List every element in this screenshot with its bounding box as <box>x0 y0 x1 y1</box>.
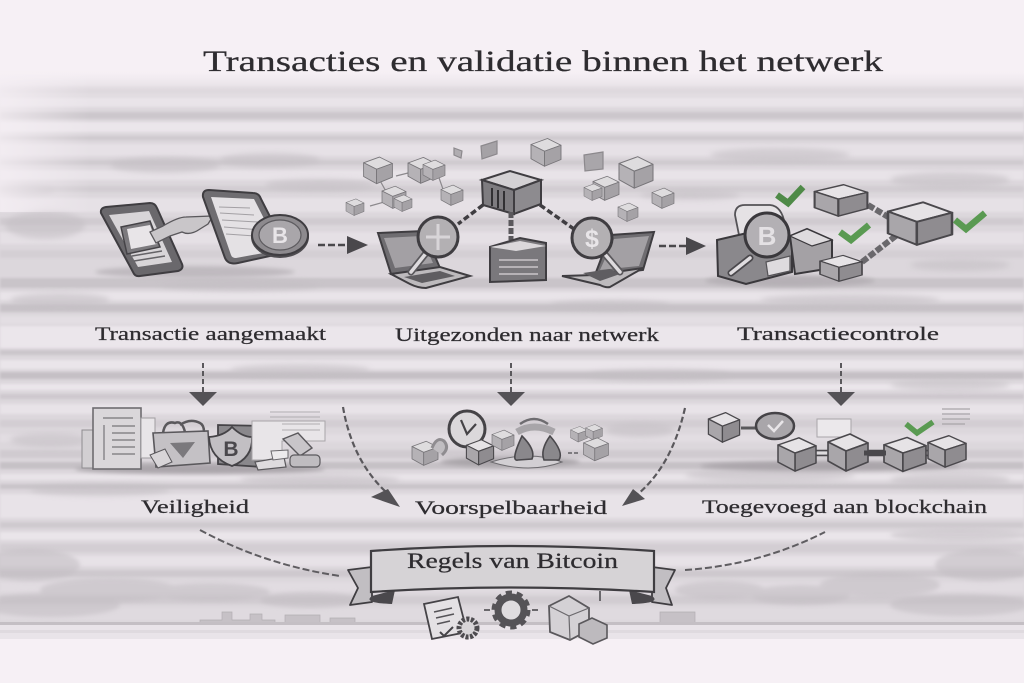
check 3 <box>955 213 985 229</box>
illustration: uitgezonden naar netwerk (central server, laptops, cubes) <box>346 138 674 288</box>
label: transactiecontrole: Transactiecontrole <box>737 324 939 345</box>
arrow: dashed curve left to banner <box>200 530 340 576</box>
lower server box <box>490 238 546 282</box>
title: Transacties en validatie binnen het netwerk <box>203 45 883 78</box>
magnifier with bitcoin <box>731 213 789 273</box>
scale weights <box>515 419 560 460</box>
padlock/bag <box>735 205 785 240</box>
icon: bitcoin coin: B <box>272 223 288 248</box>
label: veiligheid: Veiligheid <box>141 497 250 518</box>
chain links <box>805 450 940 456</box>
icon: tablet <box>203 190 288 263</box>
banner tails <box>348 567 675 605</box>
papers and rolls <box>252 412 325 470</box>
clock <box>449 411 485 447</box>
arrow: down left <box>189 363 217 406</box>
label: uitgezonden naar netwerk: Uitgezonden naar netwerk <box>395 325 660 346</box>
chains <box>862 205 906 262</box>
icon: bitcoin coin <box>251 215 309 258</box>
magnifier with bitcoin: B <box>758 221 776 251</box>
cube: right <box>888 202 952 245</box>
icon: hand <box>150 216 213 243</box>
banner fold right <box>629 590 654 604</box>
hills <box>0 529 1024 617</box>
second box <box>790 229 832 274</box>
illustration: veiligheid (documents, bag, shield) <box>75 408 325 474</box>
illustration: transactiecontrole (boxes, chain, checks) <box>705 185 985 287</box>
cube behind <box>492 430 514 450</box>
skyline <box>200 612 695 624</box>
banner text: Regels van Bitcoin <box>407 548 618 573</box>
cube left small <box>412 441 438 465</box>
document stack <box>82 408 155 469</box>
chain link highlight <box>805 451 940 455</box>
central server cube <box>482 171 541 214</box>
illustration: toegevoegd aan blockchain (chained cubes) <box>700 409 970 471</box>
left magnifier <box>411 217 458 272</box>
main box <box>717 230 792 284</box>
cube 2 <box>828 434 868 471</box>
label: toegevoegd aan blockchain: Toegevoegd aan blockchain <box>702 497 988 518</box>
banner fold left <box>370 590 395 604</box>
illustration: transactie aangemaakt (phone, tablet, coin) <box>95 190 309 278</box>
cubes right <box>568 424 608 461</box>
cube 3 <box>884 437 926 471</box>
banner body <box>371 546 654 592</box>
dashed links <box>458 205 574 229</box>
network of small cubes <box>346 138 674 222</box>
shield with bitcoin <box>209 425 266 467</box>
icon: phone <box>101 203 182 276</box>
icon: gear <box>484 593 538 627</box>
paper <box>817 419 851 437</box>
cube 1 <box>778 438 816 471</box>
arrow: down middle <box>497 363 525 406</box>
arrow: dashed curve right to banner <box>685 532 825 570</box>
label: voorspelbaarheid: Voorspelbaarheid <box>415 498 608 519</box>
scale plate <box>491 456 562 468</box>
cube top-left <box>708 413 740 442</box>
arrow: to broadcast <box>318 236 368 254</box>
cube 4 <box>928 436 966 467</box>
check <box>906 422 933 433</box>
cube: small <box>820 255 862 281</box>
arrow: to verification <box>659 237 706 255</box>
check 1 <box>777 187 803 203</box>
left laptop <box>378 231 470 288</box>
arrow: curved right to voorspelbaarheid <box>622 408 685 506</box>
check 2 <box>840 225 869 240</box>
right laptop <box>562 232 654 287</box>
shield with bitcoin: B <box>223 438 239 461</box>
arrow: down right <box>827 363 855 406</box>
arrow: curved left to voorspelbaarheid <box>343 407 400 507</box>
label: transactie aangemaakt: Transactie aangemaakt <box>95 324 327 345</box>
banner: regels van bitcoin <box>348 546 675 605</box>
checked coin <box>741 413 794 439</box>
cube centre <box>466 440 494 465</box>
chain link <box>508 212 514 240</box>
icon: document with check and gear <box>424 597 477 639</box>
right magnifier: $ <box>585 225 599 253</box>
illustration: voorspelbaarheid (clock, scale, cubes) <box>412 411 608 468</box>
right magnifier <box>572 218 620 272</box>
icon: two cubes <box>549 591 607 644</box>
chain connector <box>864 450 886 456</box>
lock arc <box>432 440 447 455</box>
bag <box>150 421 210 468</box>
cube: top <box>815 185 867 216</box>
paper right <box>942 409 970 424</box>
